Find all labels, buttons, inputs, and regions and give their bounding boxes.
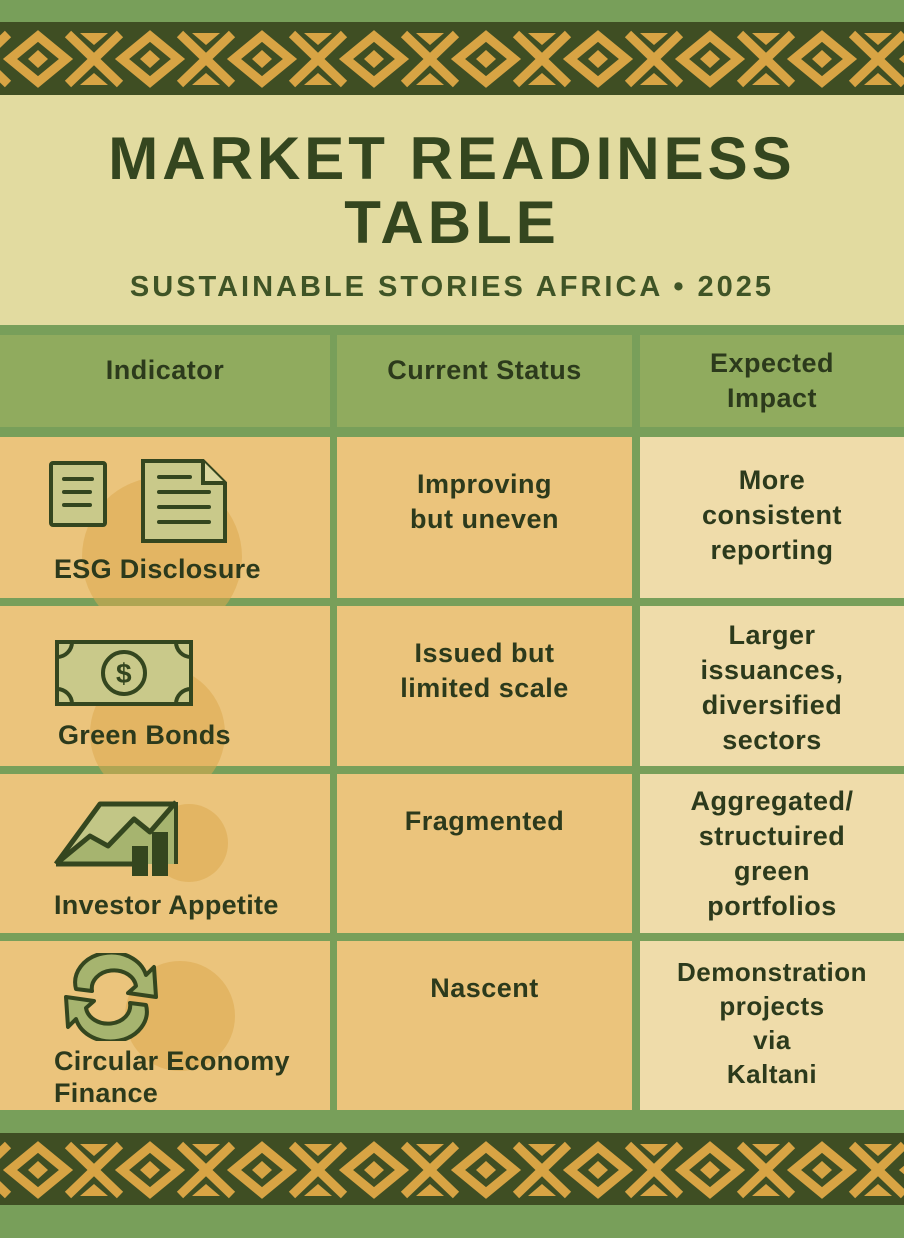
impact 2: diversified [702,690,842,720]
row 2: Green Bonds [0,606,330,766]
impact 4: via [753,1025,791,1055]
label: Green Bonds [58,720,231,750]
top decorative border [0,22,904,95]
impact 1 [640,437,904,598]
icon: documents [49,459,227,543]
header: Expected Impact: Impact [727,383,817,413]
subtitle: SUSTAINABLE STORIES AFRICA • 2025 [130,271,774,303]
label: Circular Economy [54,1046,290,1076]
status 1: but uneven [410,504,559,534]
status 2 [337,606,632,766]
impact 3 [640,774,904,933]
status 2: Issued but [414,638,554,668]
impact 1: More [739,465,805,495]
status 2: limited scale [400,673,569,703]
impact 4: projects [719,991,825,1021]
impact 4: Demonstration [677,957,867,987]
table [0,335,904,1110]
header: Indicator: Indicator [106,354,224,384]
icon: banknote [55,640,193,706]
impact 1: reporting [710,535,834,565]
row 1: ESG Disclosure [0,437,330,598]
impact 2: issuances, [700,655,844,685]
header panel [0,95,904,325]
impact 3: structuired [699,821,845,851]
row 4: Circular Economy Finance [0,941,330,1110]
row 3: Investor Appetite [0,774,330,933]
icon: banknote: $ [116,658,132,689]
label: ESG Disclosure [54,554,261,584]
header: Current Status: Current Status [387,354,582,384]
header: Current Status [337,335,632,427]
title [108,125,796,256]
label [54,1046,290,1108]
icon: circular arrows [64,953,158,1041]
impact 2: sectors [722,725,822,755]
header: Expected Impact [640,335,904,427]
status 3 [337,774,632,933]
header: Indicator [0,335,330,427]
impact 3: green [734,856,810,886]
status 4: Nascent [430,973,539,1003]
impact 4 [640,941,904,1110]
impact 3: portfolios [707,891,837,921]
impact 3: Aggregated/ [690,786,854,816]
status 3: Fragmented [405,806,564,836]
label: Investor Appetite [54,890,279,920]
header: Expected Impact: Expected [710,348,834,378]
impact 1: consistent [702,500,842,530]
title: TABLE [344,189,560,256]
label: Finance [54,1078,158,1108]
title: MARKET READINESS [108,125,796,192]
status 1 [337,437,632,598]
status 4 [337,941,632,1110]
impact 2: Larger [728,620,816,650]
impact 4: Kaltani [727,1059,817,1089]
impact 2 [640,606,904,766]
status 1: Improving [417,469,552,499]
icon: growth chart [54,800,178,876]
bottom decorative border [0,1133,904,1205]
